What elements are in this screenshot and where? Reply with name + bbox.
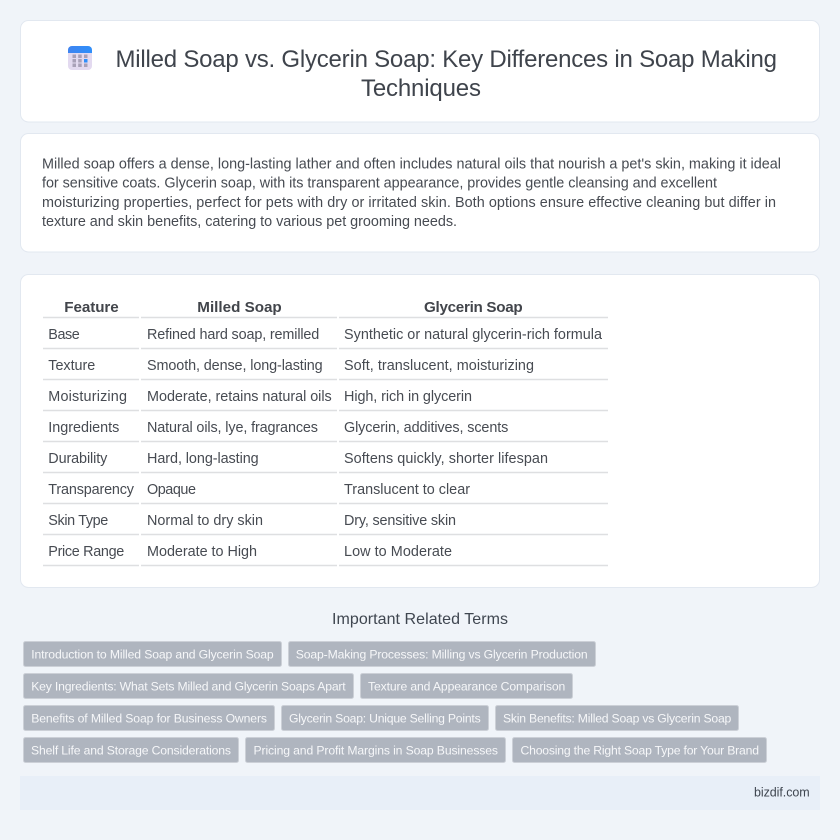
tag: pricing: Pricing and Profit Margins in Soap Businesses: [254, 743, 498, 757]
tag: introduction: [24, 642, 282, 666]
table row: Transparency: [43, 482, 608, 504]
table row: Base: Synthetic or natural glycerin-rich formula: [344, 327, 602, 343]
tag: shelf life: Shelf Life and Storage Considerations: [31, 743, 231, 757]
table row: Price Range: Moderate to High: [147, 544, 257, 560]
text block: intro paragraph: for sensitive coats. Glycerin soap, with its transparent appearance, provides gentle cleansing and excellent: [42, 176, 717, 192]
tag: ingredients: [24, 674, 354, 698]
tag: benefits: Benefits of Milled Soap for Business Owners: [31, 711, 267, 725]
tag: right soap type: Choosing the Right Soap Type for Your Brand: [520, 743, 759, 757]
table row: Texture: Smooth, dense, long-lasting: [147, 358, 323, 374]
tag: introduction: Introduction to Milled Soap and Glycerin Soap: [31, 647, 274, 661]
heading: related terms: Important Related Terms: [332, 611, 508, 628]
panel: introduction text: [20, 134, 820, 252]
table row: Base: Refined hard soap, remilled: [147, 327, 319, 343]
table row: Price Range: [43, 544, 608, 566]
table row: Moisturizing: [43, 389, 608, 410]
table row: Skin Type: [43, 513, 608, 534]
text block: intro paragraph: moisturizing properties, perfect for pets with dry or irritated skin. Both options ensure effective cleaning but differ in: [42, 195, 776, 211]
table row: Skin Type: Dry, sensitive skin: [344, 513, 456, 529]
tag: skin benefits: [496, 706, 738, 730]
table header row: Feature: [64, 299, 119, 316]
tag: selling points: Glycerin Soap: Unique Selling Points: [289, 711, 481, 725]
related term tags: [24, 642, 766, 762]
footer: bizdif.com: [754, 786, 810, 800]
text block: intro paragraph: texture and skin benefits, catering to various pet grooming needs.: [42, 214, 457, 230]
table row: Moisturizing: Moisturizing: [48, 389, 127, 405]
table row: Ingredients: [43, 420, 608, 442]
title: Techniques: [361, 75, 481, 102]
table row: Durability: Softens quickly, shorter lifespan: [344, 451, 548, 467]
table row: Texture: Soft, translucent, moisturizing: [344, 358, 534, 374]
table row: Transparency: Transparency: [48, 482, 135, 498]
table row: Texture: Texture: [48, 358, 95, 374]
tag: selling points: [282, 706, 488, 730]
table row: Base: Base: [48, 327, 80, 343]
table header row: Glycerin Soap: [424, 299, 523, 316]
table row: Ingredients: Ingredients: [48, 420, 119, 436]
icon: calendar grid: [68, 46, 92, 70]
table row: Transparency: Opaque: [147, 482, 196, 498]
table row: Durability: [43, 451, 608, 472]
panel: comparison table: [20, 274, 820, 588]
tag: texture: [360, 674, 572, 698]
table row: Moisturizing: Moderate, retains natural oils: [147, 389, 332, 405]
table row: Texture: [43, 358, 608, 380]
table row: Price Range: Low to Moderate: [344, 544, 452, 560]
tag: right soap type: [512, 738, 766, 762]
table row: Durability: Durability: [48, 451, 108, 467]
table row: Transparency: Translucent to clear: [344, 482, 470, 498]
tag: skin benefits: Skin Benefits: Milled Soap vs Glycerin Soap: [503, 711, 732, 725]
table row: Ingredients: Glycerin, additives, scents: [344, 420, 508, 436]
table row: Price Range: Price Range: [48, 544, 124, 560]
panel: title card: [20, 20, 820, 122]
title: Milled Soap vs. Glycerin Soap: Key Differences in Soap Making: [116, 46, 777, 73]
text block: intro paragraph: [42, 156, 781, 230]
tag: benefits: [24, 706, 274, 730]
table row: Skin Type: Skin Type: [48, 513, 108, 529]
tag: processes: Soap-Making Processes: Milling vs Glycerin Production: [296, 647, 588, 661]
table row: Ingredients: Natural oils, lye, fragrances: [147, 420, 318, 436]
table row: Base: [43, 327, 608, 348]
table row: Durability: Hard, long-lasting: [147, 451, 259, 467]
footer: [20, 776, 820, 810]
table row: Moisturizing: High, rich in glycerin: [344, 389, 472, 405]
table header row: Milled Soap: [197, 299, 282, 316]
tag: texture: Texture and Appearance Comparison: [368, 679, 565, 693]
tag: processes: [288, 642, 596, 666]
tag: ingredients: Key Ingredients: What Sets Milled and Glycerin Soaps Apart: [31, 679, 346, 693]
tag: pricing: [246, 738, 506, 762]
title: [116, 46, 777, 102]
text block: intro paragraph: Milled soap offers a dense, long-lasting lather and often includes natural oils that nourish a pet's skin, making it ideal: [42, 156, 781, 172]
table row: Skin Type: Normal to dry skin: [147, 513, 263, 529]
table header row: [43, 299, 608, 318]
tag: shelf life: [24, 738, 238, 762]
